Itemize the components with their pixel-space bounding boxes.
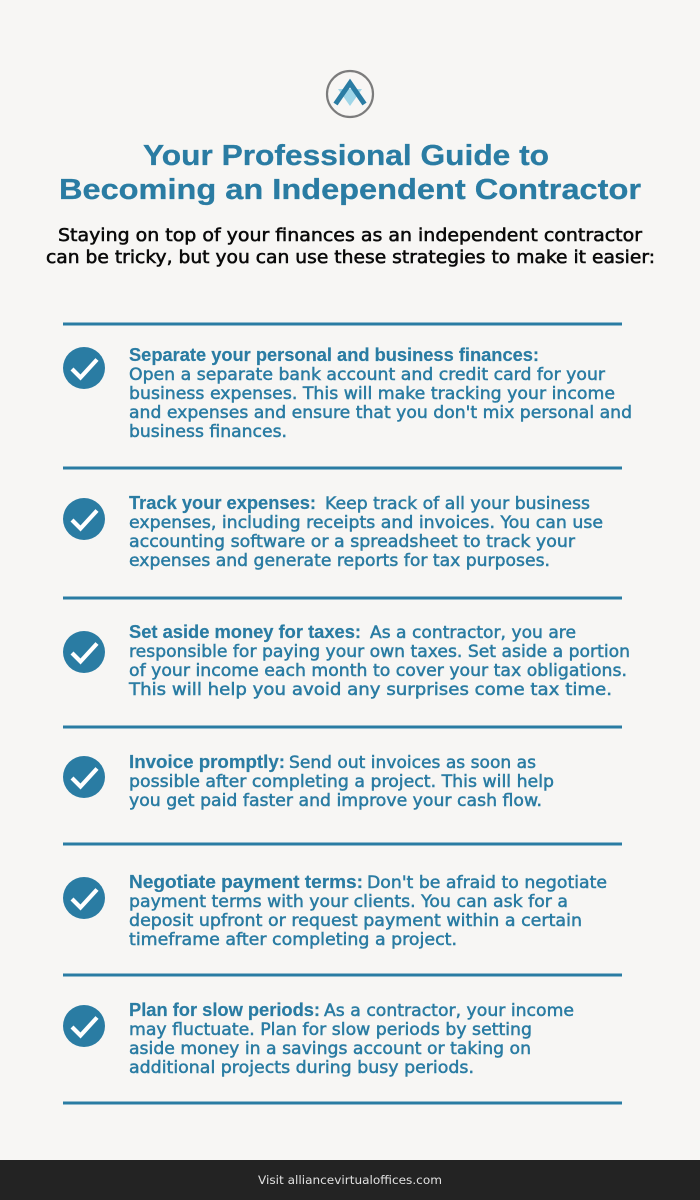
- icon: check mark 3: [63, 631, 105, 673]
- icon: company logo: [327, 71, 373, 117]
- text: separate finances: Separate your personal and business finances:: [129, 345, 539, 365]
- panel: track expenses: [63, 493, 603, 571]
- intro text: can be tricky, but you can use these strategies to make it easier:: [46, 247, 655, 268]
- title: Your Professional Guide to: [143, 140, 549, 172]
- panel: invoice promptly: [63, 752, 554, 811]
- text: separate finances: business finances.: [129, 422, 287, 442]
- text: track expenses: accounting software or a spreadsheet to track your: [129, 532, 575, 552]
- footer text: Visit alliancevirtualoffices.com: [258, 1173, 442, 1187]
- text: negotiate payment terms: payment terms with your clients. You can ask for a: [129, 892, 568, 912]
- footer bar: [0, 1160, 700, 1200]
- icon: check mark 2: [63, 498, 105, 540]
- text: separate finances: business expenses. This will make tracking your income: [129, 384, 615, 404]
- text: plan for slow periods: additional projects during busy periods.: [129, 1058, 474, 1078]
- text: separate finances: Open a separate bank account and credit card for your: [129, 365, 605, 385]
- intro text: [46, 225, 655, 268]
- text: track expenses: expenses and generate reports for tax purposes.: [129, 551, 550, 571]
- text: plan for slow periods: may fluctuate. Plan for slow periods by setting: [129, 1020, 532, 1040]
- text: invoice promptly: [129, 752, 554, 811]
- text: invoice promptly: you get paid faster and improve your cash flow.: [129, 791, 542, 811]
- text: plan for slow periods: As a contractor, your income: [324, 1001, 574, 1021]
- title: [59, 140, 641, 206]
- text: separate finances: [129, 345, 632, 442]
- text: negotiate payment terms: Negotiate payment terms:: [129, 872, 363, 892]
- text: track expenses: expenses, including receipts and invoices. You can use: [129, 513, 603, 533]
- text: invoice promptly: Send out invoices as soon as: [289, 753, 536, 773]
- text: track expenses: Keep track of all your business: [325, 494, 590, 514]
- text: plan for slow periods: [129, 1000, 574, 1078]
- title: Becoming an Independent Contractor: [59, 174, 641, 206]
- panel: negotiate payment terms: [63, 872, 607, 950]
- text: set aside for taxes: As a contractor, you are: [370, 623, 576, 643]
- panel: plan for slow periods: [63, 1000, 574, 1078]
- text: track expenses: Track your expenses:: [129, 493, 316, 513]
- icon: check mark 5: [63, 877, 105, 919]
- icon: check mark 1: [63, 347, 105, 389]
- text: negotiate payment terms: deposit upfront or request payment within a certain: [129, 911, 582, 931]
- text: invoice promptly: possible after completing a project. This will help: [129, 772, 554, 792]
- text: plan for slow periods: Plan for slow periods:: [129, 1000, 320, 1020]
- text: separate finances: and expenses and ensure that you don't mix personal and: [129, 403, 632, 423]
- text: set aside for taxes: [128, 622, 630, 700]
- text: negotiate payment terms: timeframe after completing a project.: [129, 930, 457, 950]
- icon: check mark 4: [63, 756, 105, 798]
- text: plan for slow periods: aside money in a savings account or taking on: [129, 1039, 531, 1059]
- intro text: Staying on top of your finances as an independent contractor: [58, 225, 643, 246]
- text: set aside for taxes: of your income each month to cover your tax obligations.: [129, 661, 627, 681]
- icon: check mark 6: [63, 1005, 105, 1047]
- text: set aside for taxes: Set aside money for taxes:: [129, 622, 361, 642]
- panel: separate finances: [63, 345, 632, 442]
- text: invoice promptly: Invoice promptly:: [129, 752, 285, 772]
- text: set aside for taxes: This will help you avoid any surprises come tax time.: [128, 680, 612, 700]
- text: negotiate payment terms: [129, 872, 607, 950]
- text: set aside for taxes: responsible for paying your own taxes. Set aside a portion: [129, 642, 630, 662]
- text: track expenses: [129, 493, 603, 571]
- text: negotiate payment terms: Don't be afraid to negotiate: [367, 873, 607, 893]
- panel: set aside for taxes: [63, 622, 630, 700]
